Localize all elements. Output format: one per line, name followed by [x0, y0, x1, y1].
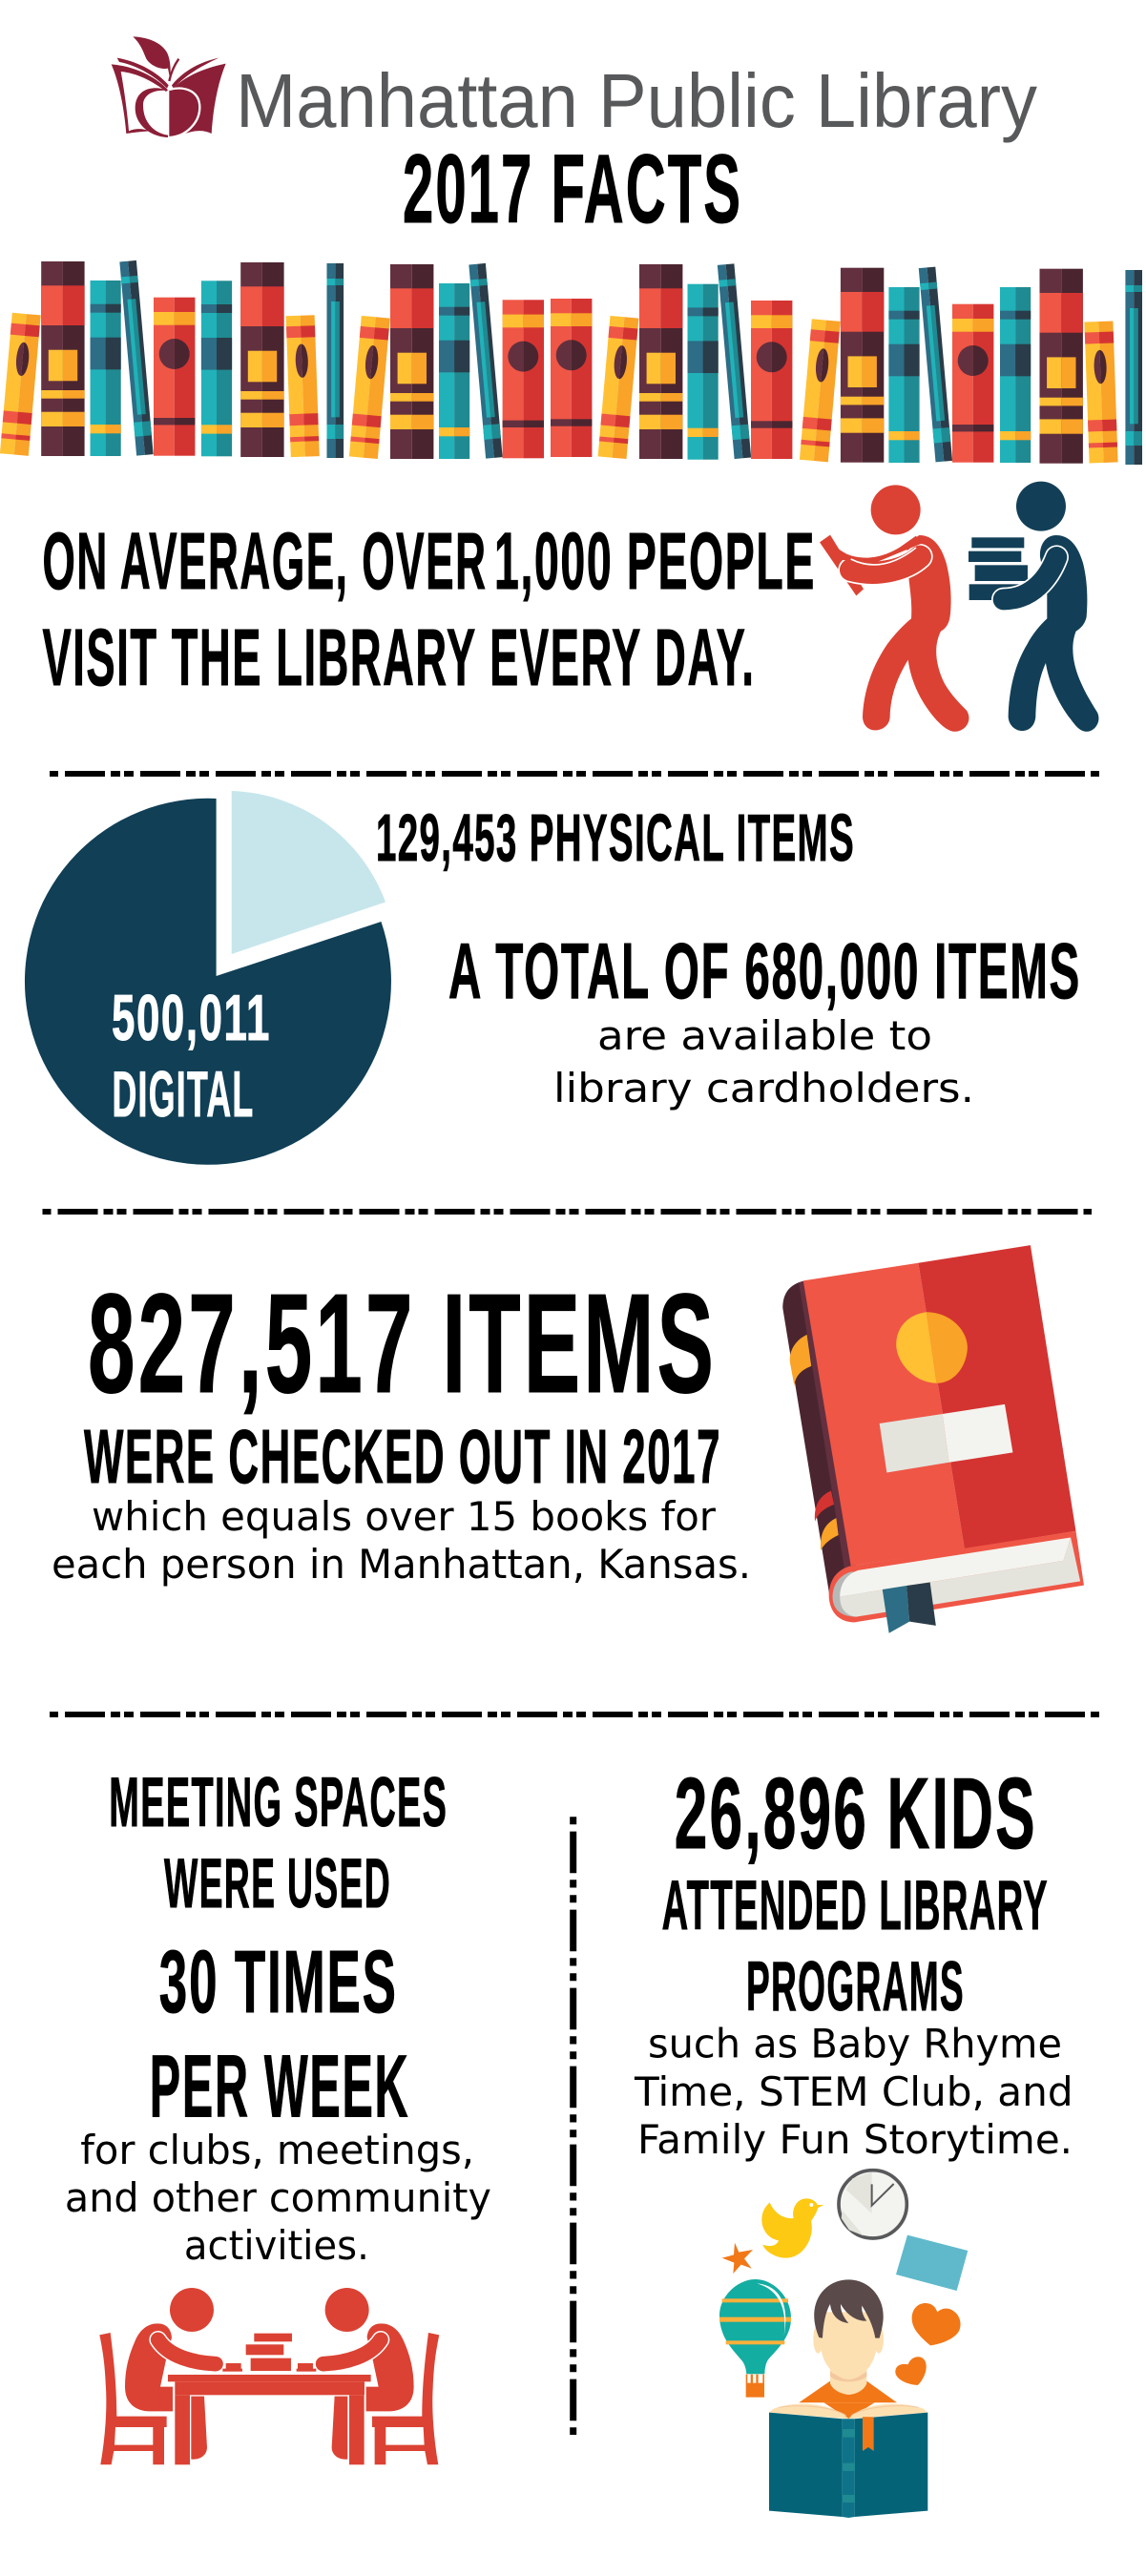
- pie label: digital count: 500,011: [112, 982, 271, 1054]
- body line 2: each person in Manhattan, Kansas.: [52, 1541, 751, 1588]
- title: 2017 FACTS: [403, 135, 742, 243]
- body line 3: Family Fun Storytime.: [637, 2116, 1073, 2163]
- panel: kids programs: [634, 1757, 1073, 2518]
- body line 1: for clubs, meetings,: [80, 2127, 474, 2173]
- body line 2: Time, STEM Club, and: [634, 2068, 1073, 2115]
- icon: two people at a table: [99, 2288, 439, 2464]
- total items text line 1: are available to: [597, 1012, 932, 1059]
- logo wordmark: Manhattan Public Library: [236, 58, 1037, 143]
- panel: checkouts: [52, 1245, 1084, 1633]
- heading line 1: 1,000 PEOPLE: [494, 516, 816, 606]
- body line 2: and other community: [65, 2174, 491, 2221]
- icon: red book: [782, 1245, 1084, 1633]
- pie chart: [25, 791, 391, 1165]
- panel: daily visitors: [42, 482, 1098, 732]
- logo: apple and open book: [112, 36, 226, 137]
- icon: child reading with floating ideas: [719, 2171, 968, 2518]
- body line 1: such as Baby Rhyme: [648, 2020, 1062, 2067]
- big figure line 2: PER WEEK: [150, 2037, 409, 2136]
- panel: collection size: [25, 791, 1081, 1165]
- body line 3: activities.: [184, 2222, 369, 2269]
- total items text line 2: library cardholders.: [553, 1065, 974, 1111]
- body line 1: which equals over 15 books for: [92, 1493, 717, 1540]
- heading line 2: WERE USED: [164, 1845, 391, 1922]
- icon: two people carrying books: [820, 482, 1098, 732]
- pie label: digital: DIGITAL: [113, 1058, 254, 1131]
- big figure: 30 TIMES: [159, 1932, 398, 2031]
- big number: 827,517 ITEMS: [88, 1265, 717, 1423]
- bookshelf row: [0, 260, 1142, 465]
- heading line 1: MEETING SPACES: [109, 1764, 448, 1841]
- heading line 1: ON AVERAGE, OVER: [42, 516, 487, 606]
- panel: meeting spaces: [65, 1764, 491, 2464]
